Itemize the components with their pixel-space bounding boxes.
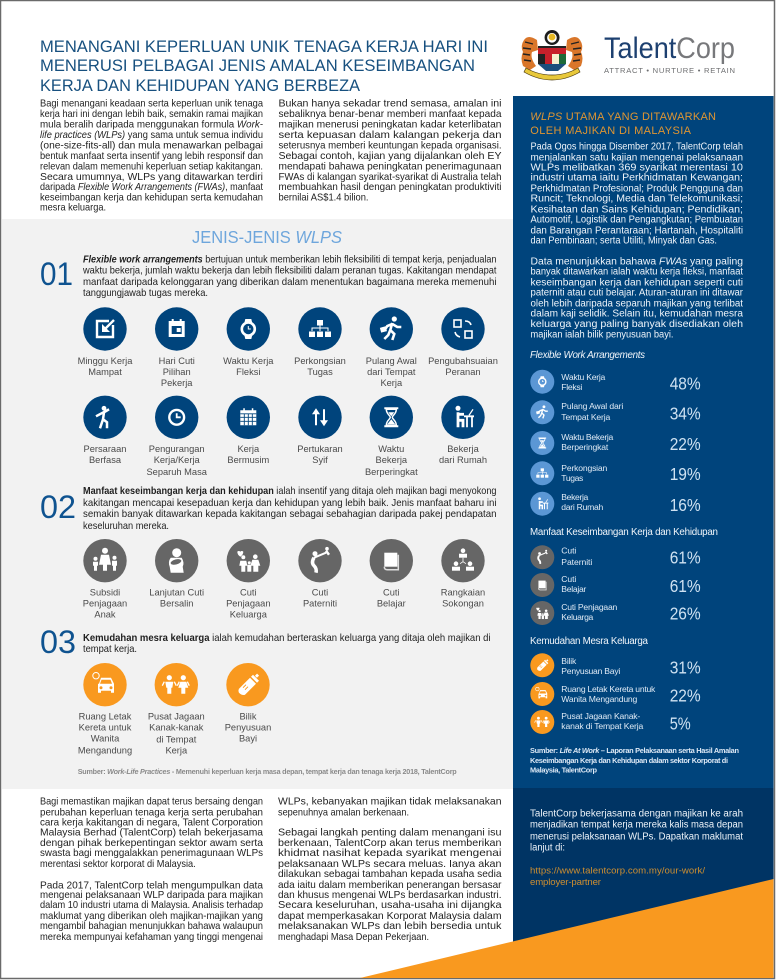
intro text: left column: Secara umumnya, WLPs yang ditawarkan terdiri [40, 172, 263, 183]
section 01 [40, 254, 497, 299]
heading: wlps utama: OLEH MAJIKAN DI MALAYSIA [530, 125, 692, 137]
icon: waktu kerja fleksi: Waktu Kerja [223, 356, 274, 366]
closing text: right column: berkenaan, TalentCorp akan terus memberikan [278, 838, 502, 849]
stat: cuti paterniti: 61% [670, 547, 701, 567]
icon: pulang awal [366, 307, 417, 388]
icon: pengubahsuaian peranan [428, 307, 498, 377]
stat: waktu bekerja berperingkat [530, 431, 701, 455]
icon: subsidi penjagaan anak: Penjagaan [83, 598, 127, 608]
icon: cuti penjagaan keluarga [226, 539, 271, 619]
source note: survey [530, 746, 739, 774]
icon: persaraan berfasa: Persaraan [84, 444, 126, 454]
icon: pengubahsuaian peranan: Pengubahsuaian [428, 356, 498, 366]
section 03: 03 [40, 624, 76, 660]
section 01: manfaat daripada kelonggaran yang diberikan dalam menentukan bagaimana mereka memenuhi [83, 277, 496, 288]
stat: waktu bekerja berperingkat: Berperingkat [561, 442, 609, 452]
intro text: right column: Bukan hanya sekadar trend semasa, amalan ini [278, 98, 502, 110]
section 02: semakin banyak ditawarkan kepada kakitangan sebagai sebahagian daripada pakej pendapatan [83, 509, 496, 520]
closing text: right column: menghadapi Masa Depan Pekerjaan. [278, 932, 429, 943]
text: survey paragraph: dan Pembinaan; serta Utiliti, Minyak dan Gas. [530, 236, 717, 247]
icon: pulang awal: dari Tempat [367, 367, 416, 377]
section 01: Flexible work arrangements bertujuan untuk memberikan lebih fleksibiliti di tempat kerja, penjadualan [83, 254, 496, 266]
text: data paragraph: banyak ditawarkan ialah waktu kerja fleksi, manfaat [530, 266, 743, 277]
section 03: tempat kerja. [83, 644, 137, 655]
closing text: right column: dapat memperkasakan Korporat Malaysia dalam [278, 911, 502, 922]
icon: hari cuti pilihan pekerja [155, 307, 198, 388]
intro text: right column [278, 98, 502, 204]
intro text: left column: life practices (WLPs) yang sama untuk semua individu [40, 130, 263, 141]
icon: bekerja dari rumah [439, 396, 487, 465]
text: survey paragraph: Automotif, Logistik dan Pengangkutan; Pembuatan [530, 215, 743, 226]
icon: bilik penyusuan bayi: Bilik [239, 711, 257, 721]
text: survey paragraph: WLPs melibatkan 369 syarikat merentasi 10 [530, 163, 743, 174]
stat: cuti belajar [530, 573, 701, 597]
icon: ruang letak kereta: Ruang Letak [79, 711, 132, 721]
closing text: right column: sepenuhnya amalan berkenaan. [278, 807, 409, 818]
closing text: left column: cara kerja kakitangan di negara, Talent Corporation [40, 817, 263, 828]
icon: waktu bekerja berperingkat: Bekerja [376, 455, 408, 465]
closing text: right column: Sebagai langkah penting dalam menangani isu [278, 827, 502, 838]
icon: pusat jagaan kanak-kanak: di Tempat [156, 734, 197, 744]
stat: perkongsian tugas: Perkongsian [561, 463, 608, 473]
stat: waktu bekerja berperingkat: 22% [670, 434, 701, 454]
stat: bekerja dari rumah: 16% [670, 495, 701, 515]
stat: cuti paterniti: Paterniti [561, 557, 592, 567]
panel: wlps survey [513, 96, 774, 788]
stat: cuti penjagaan keluarga: 26% [670, 603, 701, 623]
closing text: right column: dan khusus mengenai WLPs berdasarkan industri. [278, 890, 502, 901]
logo: talentcorp: TalentCorp [604, 32, 735, 65]
icon: bekerja dari rumah: dari Rumah [439, 455, 487, 465]
text: data paragraph: Data menunjukkan bahawa FWAs yang paling [530, 256, 743, 267]
heading: manfaat: Manfaat Keseimbangan Kerja dan Kehidupan [530, 527, 718, 538]
icon: hari cuti pilihan pekerja: Pilihan [163, 367, 191, 377]
icon: pengurangan kerja: Separuh Masa [146, 467, 208, 477]
icon: waktu kerja fleksi [223, 307, 274, 377]
stat: pusat jagaan: Pusat Jagaan Kanak- [561, 711, 640, 721]
icon: pengurangan kerja [146, 396, 208, 477]
text: data paragraph: keluarga yang paling banyak disediakan oleh [530, 319, 743, 330]
stat: waktu bekerja berperingkat: Waktu Bekerja [561, 432, 614, 442]
icon: bilik penyusuan bayi: Penyusuan [225, 722, 271, 732]
closing text: left column: dalam 10 industri utama di Malaysia. Analisis terhadap [40, 900, 263, 911]
icon: pulang awal: Pulang Awal [366, 356, 417, 366]
icon: cuti belajar: Belajar [377, 598, 406, 608]
closing text: left column: mereka mempunyai kefahaman yang tinggi mengenai [40, 932, 263, 943]
source note: survey: Malaysia, TalentCorp [530, 766, 597, 774]
icon: minggu kerja mampat [78, 307, 133, 377]
closing text: right column: dilakukan sebagai tambahan kepada usaha sedia [278, 869, 502, 880]
intro text: left column: keseimbangan kerja dan kehidupan serta kemudahan [40, 192, 263, 204]
section 01: 01 [40, 256, 73, 292]
intro text: left column: (one-size-fits-all) dan mula menawarkan pelbagai [40, 140, 263, 152]
section 03: Kemudahan mesra keluarga ialah kemudahan berteraskan keluarga yang ditaja oleh majikan di [83, 633, 490, 644]
text: survey paragraph: menjalankan satu kajian mengenai pelaksanaan [530, 152, 743, 163]
stat: waktu kerja fleksi [530, 370, 701, 394]
icon: cuti penjagaan keluarga: Keluarga [230, 609, 268, 619]
stat: ruang letak kereta: 22% [670, 685, 701, 705]
icon: waktu bekerja berperingkat: Berperingkat [365, 467, 418, 477]
intro text: left column: bentuk manfaat serta insentif yang lebih responsif dan [40, 151, 263, 162]
icon: cuti belajar [370, 539, 413, 608]
stat: pusat jagaan [530, 710, 691, 734]
stat: cuti paterniti: Cuti [561, 546, 576, 556]
closing text: right column: WLPs, kebanyakan majikan tidak melaksanakan [278, 796, 502, 807]
intro text: left column: mesra keluarga. [40, 202, 106, 214]
stat: cuti belajar: 61% [670, 576, 701, 596]
stat: pulang awal: Tempat Kerja [561, 412, 611, 422]
section 02 [40, 486, 497, 532]
title: MENERUSI PELBAGAI JENIS AMALAN KESEIMBANGAN [40, 56, 475, 75]
text: call to action: TalentCorp bekerjasama dengan majikan ke arah [530, 809, 743, 820]
icon: pengurangan kerja: Kerja/Kerja [154, 455, 201, 465]
icon: pertukaran syif: Syif [312, 455, 328, 465]
icon: cuti paterniti: Cuti [312, 587, 328, 597]
icon: waktu bekerja berperingkat [365, 396, 418, 477]
stat: cuti paterniti [530, 545, 701, 569]
text: survey paragraph: Perkhidmatan Profesional; Produk Pengguna dan [530, 183, 743, 194]
icon: subsidi penjagaan anak [83, 539, 127, 619]
closing text: left column: mengenai pelaksanaan WLP daripada para majikan [40, 890, 263, 901]
stat: bilik penyusuan bayi [530, 653, 701, 677]
icon: waktu kerja fleksi: Fleksi [236, 367, 260, 377]
closing text: right column: melaksanakan WLPs dan lebih bersedia untuk [278, 921, 502, 932]
intro text: right column: mendapati bahawa peningkatan penerimagunaan [278, 162, 502, 172]
text: call to action [530, 809, 743, 854]
icon: persaraan berfasa: Berfasa [89, 455, 122, 465]
icon: hari cuti pilihan pekerja: Pekerja [161, 378, 193, 388]
stat: ruang letak kereta [530, 682, 701, 706]
logo: malaysian coat of arms [522, 30, 582, 80]
icon: kerja bermusim: Bermusim [227, 455, 269, 465]
heading: wlps utama [530, 111, 716, 137]
icons row 2 [83, 396, 487, 477]
icons row 3 [83, 539, 485, 619]
icon: cuti penjagaan keluarga: Cuti [240, 587, 257, 597]
icon: bilik penyusuan bayi: Bayi [239, 733, 257, 743]
icon: pusat jagaan kanak-kanak: Pusat Jagaan [148, 711, 205, 721]
section 01: tanggungjawab tugas mereka. [83, 288, 208, 299]
source note: Sumber: Work-Life Practices - Memenuhi keperluan kerja masa depan, tempat kerja dan tenaga kerja 2018, TalentCorp [78, 767, 457, 776]
source note: survey: Sumber: Life At Work – Laporan Pelaksanaan serta Hasil Amalan [530, 746, 739, 755]
icon: minggu kerja mampat: Mampat [88, 367, 122, 377]
stat: bilik penyusuan bayi: 31% [670, 657, 701, 677]
closing text: left column: Bagi memastikan majikan dapat terus bersaing dengan [40, 796, 263, 807]
panel: types of wlps [2, 219, 513, 789]
icon: hari cuti pilihan pekerja: Hari Cuti [159, 356, 195, 366]
text: survey paragraph: Pada Ogos hingga Disember 2017, TalentCorp telah [530, 142, 743, 153]
stat: pulang awal [530, 400, 701, 424]
stat: ruang letak kereta: Wanita Mengandung [561, 694, 638, 704]
text: data paragraph: keseimbangan kerja dan kehidupan seperti cuti [530, 278, 743, 289]
icon: persaraan berfasa [83, 396, 127, 465]
intro text: right column: Sebagai contoh, kajian yang dijalankan oleh EY [278, 151, 502, 162]
icon: perkongsian tugas: Tugas [307, 367, 333, 377]
icon: ruang letak kereta: Kereta untuk [79, 722, 132, 732]
intro text: left column: relevan dalam memenuhi keperluan setiap kakitangan. [40, 162, 263, 172]
text: data paragraph: paterniti atau cuti belajar. Aturan-aturan ini ditawar [530, 288, 744, 299]
panel: call to action [513, 788, 774, 978]
closing text: right column [278, 796, 502, 943]
icon: subsidi penjagaan anak: Subsidi [90, 587, 120, 597]
icon: bekerja dari rumah: Bekerja [447, 444, 480, 454]
intro text: right column: FWAs di kalangan syarikat-syarikat di Australia telah [278, 172, 502, 183]
stat: pusat jagaan: kanak di Tempat Kerja [561, 721, 644, 731]
stat: cuti penjagaan keluarga: Cuti Penjagaan [561, 602, 618, 612]
stat: perkongsian tugas: 19% [670, 464, 701, 484]
icon: pertukaran syif [297, 396, 343, 465]
stat: cuti belajar: Cuti [561, 574, 576, 584]
closing text: left column [40, 796, 263, 943]
link [530, 865, 705, 888]
text: survey paragraph: Kesihatan dan Sains Kehidupan; Pendidikan; [530, 204, 743, 215]
intro text: right column: serta kepuasan dalam kalangan pekerja dan [278, 130, 502, 141]
intro text: left column: mula beralih daripada menggunakan formula Work- [40, 120, 264, 130]
stat: ruang letak kereta: Ruang Letak Kereta untuk [561, 684, 656, 694]
icon: pusat jagaan kanak-kanak [148, 663, 205, 755]
intro text: right column: membuahkan hasil dengan peningkatan produktiviti [278, 182, 502, 193]
text: data paragraph: dalam kaji selidik. Selain itu, kemudahan mesra [530, 309, 743, 320]
stat: bekerja dari rumah: dari Rumah [561, 502, 604, 512]
icon: perkongsian tugas [294, 307, 346, 377]
stat: waktu kerja fleksi: 48% [670, 373, 701, 393]
text: call to action: menjadikan tempat kerja mereka kalis masa depan [530, 819, 743, 830]
intro text: left column: daripada Flexible Work Arrangements (FWAs), manfaat [40, 182, 263, 193]
icon: pusat jagaan kanak-kanak: Kanak-kanak [149, 722, 204, 732]
closing text: right column: pelaksanaan WLPs secara meluas. Ianya akan [278, 859, 502, 870]
icon: waktu bekerja berperingkat: Waktu [378, 444, 404, 454]
heading: jenis-jenis wlps: JENIS-JENIS WLPS [192, 227, 342, 247]
icon: lanjutan cuti bersalin: Bersalin [160, 598, 193, 608]
text: data paragraph [530, 256, 744, 341]
section 02: kakitangan mencapai kesepaduan kerja dan kehidupan yang lebih baik. Jenis manfaat baharu ini [83, 498, 496, 509]
title: MENANGANI KEPERLUAN UNIK TENAGA KERJA HARI INI [40, 37, 488, 56]
text: data paragraph: oleh lebih daripada separuh majikan yang terlibat [530, 298, 743, 309]
stat: waktu kerja fleksi: Waktu Kerja [561, 372, 606, 382]
logo: talentcorp: ATTRACT • NURTURE • RETAIN [604, 66, 735, 75]
orange corner wedge [360, 879, 774, 978]
title [40, 37, 488, 95]
source note: survey: Keseimbangan Kerja dan Kehidupan dalam sektor Korporat di [530, 756, 728, 765]
icon: kerja bermusim [227, 396, 270, 465]
stat: bekerja dari rumah [530, 492, 701, 516]
intro text: left column: Bagi menangani keadaan serta keperluan unik tenaga [40, 98, 263, 110]
heading: wlps utama: WLPS UTAMA YANG DITAWARKAN [530, 111, 716, 123]
closing text: right column: Secara keseluruhan, usaha-usaha ini dijangka [278, 900, 502, 911]
icon: pulang awal: Kerja [380, 378, 403, 388]
text: call to action: lanjut di: [530, 843, 565, 854]
stat: cuti belajar: Belajar [561, 584, 586, 594]
text: call to action: menerusi pelaksanaan WLPs. Dapatkan maklumat [530, 831, 743, 842]
icon: pengubahsuaian peranan: Peranan [445, 367, 481, 377]
icon: rangkaian sokongan: Rangkaian [441, 587, 485, 597]
icon: pusat jagaan kanak-kanak: Kerja [165, 745, 188, 755]
closing text: left column: merentasi sektor korporat di Malaysia. [40, 859, 196, 870]
icon: bilik penyusuan bayi [225, 663, 271, 743]
closing text: left column: mengambil bahagian menunjukkan bahawa walaupun [40, 921, 263, 932]
stat: perkongsian tugas [530, 461, 701, 485]
closing text: left column: swasta bagi menggalakkan penerimagunaan WLPs [40, 848, 263, 859]
icon: perkongsian tugas: Perkongsian [294, 356, 346, 366]
title: KERJA DAN KEHIDUPAN YANG BERBEZA [40, 76, 361, 95]
closing text: left column: dengan pihak berkepentingan sektor awam serta [40, 838, 263, 849]
stat: bilik penyusuan bayi: Bilik [561, 656, 577, 666]
section 03 [40, 624, 490, 660]
intro text: left column: kerja hari ini dengan lebih baik, semakin ramai majikan [40, 109, 263, 120]
text: survey paragraph [530, 142, 743, 247]
icon: lanjutan cuti bersalin: Lanjutan Cuti [149, 587, 204, 597]
icon: ruang letak kereta: Wanita [91, 733, 120, 743]
intro text: right column: bernilai AS$1.4 bilion. [278, 192, 368, 204]
stat: bekerja dari rumah: Bekerja [561, 492, 589, 502]
stat: cuti penjagaan keluarga [530, 601, 701, 625]
section 02: keseluruhan mereka. [83, 521, 169, 532]
icon: cuti paterniti: Paterniti [303, 598, 337, 608]
intro text: right column: seterusnya memberi keuntungan kepada organisasi. [278, 140, 502, 152]
closing text: right column: khidmat nasihat kepada syarikat mengenai [278, 848, 502, 859]
icon: cuti paterniti [298, 539, 342, 608]
section 02: 02 [40, 489, 76, 525]
text: survey paragraph: Runcit; Teknologi, Media dan Telekomunikasi; [530, 194, 743, 205]
icon: ruang letak kereta [78, 663, 132, 755]
heading: flexible work arrangements: Flexible Work Arrangements [530, 350, 645, 361]
icons row 1 [78, 307, 498, 388]
closing text: left column: Pada 2017, TalentCorp telah mengumpulkan data [40, 880, 263, 891]
text: data paragraph: majikan ialah bilik penyusuan bayi. [530, 330, 674, 341]
stat: perkongsian tugas: Tugas [561, 473, 583, 483]
stat: pusat jagaan: 5% [670, 713, 691, 733]
icon: cuti belajar: Cuti [383, 587, 400, 597]
closing text: left column: perubahan keperluan tenaga kerja serta perubahan [40, 807, 263, 818]
text: survey paragraph: dan Barangan Perantaraan; Hartanah, Hospitaliti [530, 226, 743, 237]
closing text: left column: Malaysia Berhad (TalentCorp) telah bekerjasama [40, 827, 263, 838]
icon: cuti penjagaan keluarga: Penjagaan [226, 598, 271, 608]
icon: rangkaian sokongan: Sokongan [442, 598, 484, 608]
section 02: Manfaat keseimbangan kerja dan kehidupan ialah insentif yang ditaja oleh majikan bagi menyokong [83, 486, 497, 497]
icon: minggu kerja mampat: Minggu Kerja [78, 356, 133, 366]
closing text: right column: ada iaitu dalam memberikan penerangan bersasar [278, 880, 502, 891]
icon: rangkaian sokongan [441, 539, 485, 608]
text: survey paragraph: industri utama iaitu Perkhidmatan Kewangan; [530, 173, 743, 184]
intro text: right column: majikan menerusi peningkatan kadar keterlibatan [278, 120, 502, 130]
stat: pulang awal: Pulang Awal dari [561, 401, 623, 411]
icons row 4 [78, 663, 271, 755]
intro text: right column: sebaliknya benar-benar memberi manfaat kepada [278, 109, 502, 120]
link: employer-partner [530, 877, 602, 888]
stat: pulang awal: 34% [670, 403, 701, 423]
section 01: waktu bekerja, jumlah waktu bekerja dan lebih fleksibiliti dalam peranan tugas. Kakitangan mendapat [82, 266, 497, 276]
icon: lanjutan cuti bersalin [149, 539, 204, 608]
icon: kerja bermusim: Kerja [237, 444, 260, 454]
intro text: left column [40, 98, 264, 214]
heading: kemudahan: Kemudahan Mesra Keluarga [530, 636, 649, 647]
closing text: left column: maklumat yang diberikan oleh majikan-majikan yang [40, 911, 263, 922]
stat: bilik penyusuan bayi: Penyusuan Bayi [561, 666, 620, 676]
stat: cuti penjagaan keluarga: Keluarga [561, 612, 594, 622]
icon: pertukaran syif: Pertukaran [297, 444, 343, 454]
icon: pengurangan kerja: Pengurangan [149, 444, 205, 454]
icon: ruang letak kereta: Mengandung [78, 745, 132, 755]
stat: waktu kerja fleksi: Fleksi [561, 382, 582, 392]
icon: subsidi penjagaan anak: Anak [94, 609, 116, 619]
link: https://www.talentcorp.com.my/our-work/ [530, 865, 705, 876]
